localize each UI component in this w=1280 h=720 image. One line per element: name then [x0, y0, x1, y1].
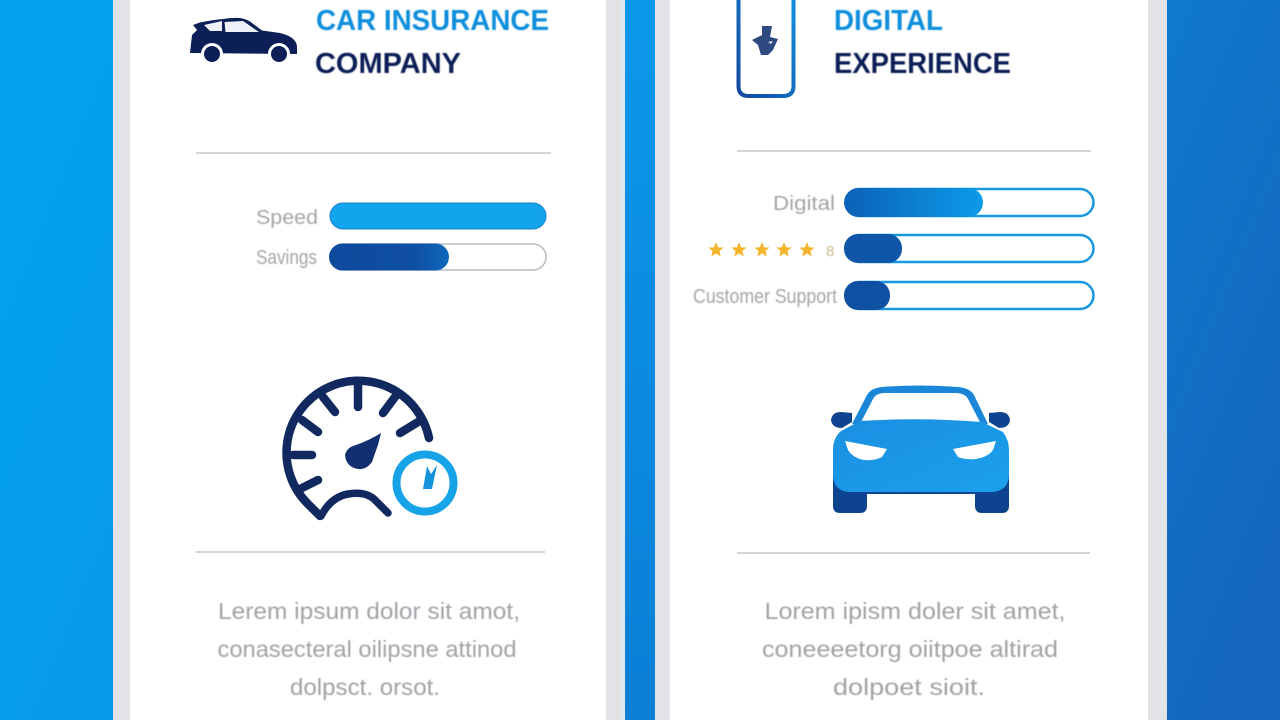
bar: digital: Digital	[773, 193, 835, 215]
text block: lorem ipsum left	[218, 598, 520, 700]
text block: lorem ipsum right	[762, 598, 1066, 700]
heading: car insurance company: COMPANY	[315, 48, 461, 80]
bar: speed	[256, 203, 546, 229]
bar: customer support: Customer Support	[693, 286, 837, 308]
icon: front view car	[831, 386, 1010, 513]
heading: car insurance company	[315, 5, 549, 80]
heading: digital experience	[834, 5, 1011, 80]
bar: speed: Speed	[256, 207, 318, 229]
text block: lorem ipsum left: dolpsct. orsot.	[290, 674, 440, 700]
bar: savings	[256, 244, 546, 270]
icon: five stars	[708, 242, 815, 256]
text block: lorem ipsum left: Lerem ipsum dolor sit amot,	[218, 598, 520, 624]
panel: digital experience	[620, 0, 1167, 720]
bar: savings: Savings	[256, 247, 317, 269]
heading: digital experience: DIGITAL	[834, 5, 943, 37]
text block: lorem ipsum right: Lorem ipism doler sit amet,	[764, 598, 1066, 624]
text block: lorem ipsum left: conasecteral oilipsne attinod	[218, 636, 516, 662]
icon: speedometer with stopwatch	[287, 381, 454, 516]
bar: customer support	[693, 281, 1094, 310]
icon: smartphone	[738, 0, 794, 96]
panel: car insurance company	[113, 0, 625, 720]
bar: star rating: 8	[826, 243, 834, 260]
heading: car insurance company: CAR INSURANCE	[316, 5, 549, 37]
bar chart: digital ratings	[693, 188, 1094, 310]
text block: lorem ipsum right: coneeeetorg oiitpoe altirad	[762, 636, 1058, 662]
text block: lorem ipsum right: dolpoet sioit.	[833, 674, 985, 700]
heading: digital experience: EXPERIENCE	[834, 48, 1011, 80]
bar: digital	[773, 188, 1094, 217]
bar: star rating	[708, 234, 1094, 263]
bar chart: speed and savings	[256, 203, 546, 270]
icon: side view car	[190, 18, 297, 65]
